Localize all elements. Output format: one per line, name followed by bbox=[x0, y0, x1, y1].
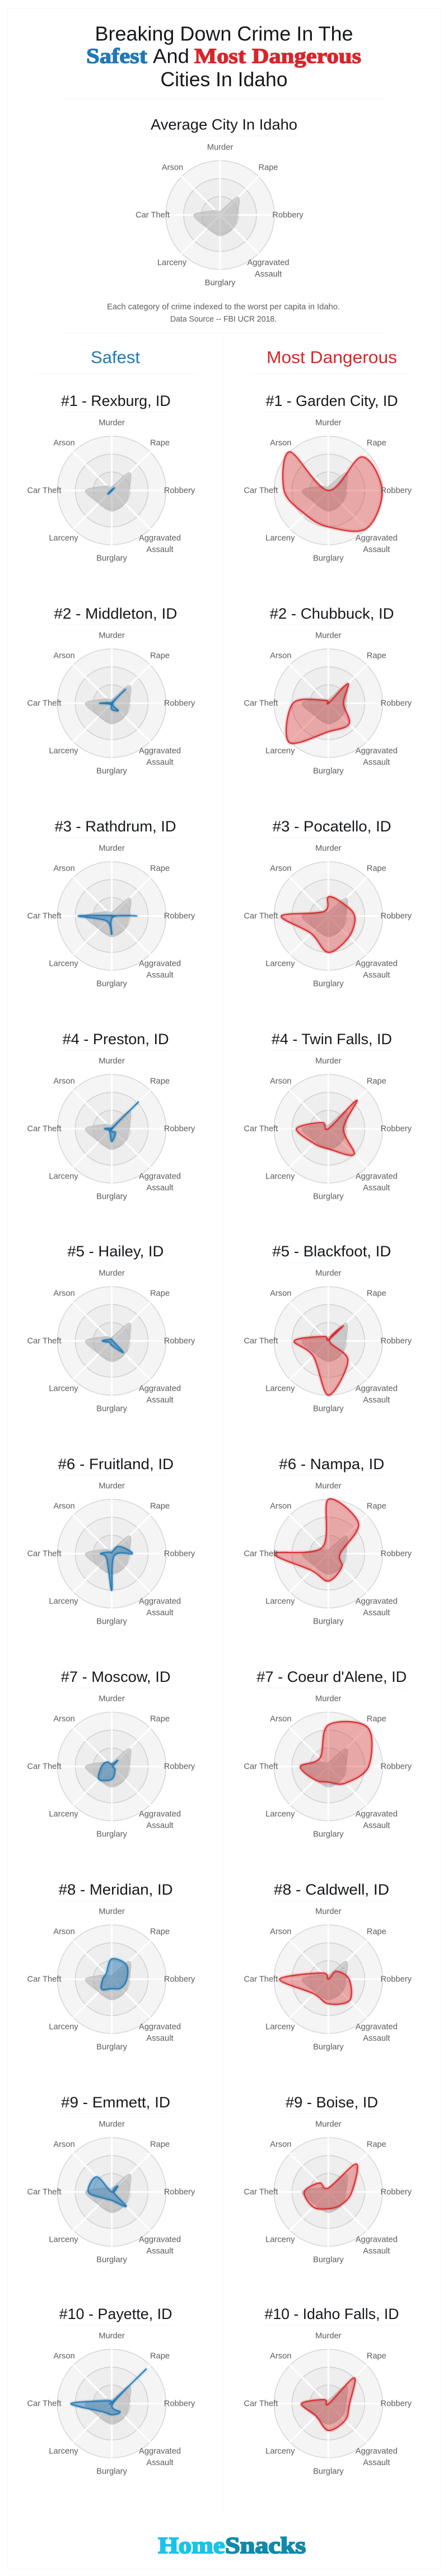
panel: #10 Idaho Falls: Murder bbox=[315, 2331, 342, 2340]
panel: #3 Rathdrum: Car Theft bbox=[27, 911, 61, 920]
panel: #1 Rexburg: Rape bbox=[150, 439, 170, 448]
panel: #2 Chubbuck bbox=[244, 605, 412, 776]
radar chart: average city: Assault bbox=[255, 270, 282, 279]
panel: #2 Middleton: Burglary bbox=[96, 767, 127, 776]
panel: #9 Boise: Aggravated bbox=[356, 2235, 398, 2244]
panel: #2 Middleton bbox=[27, 605, 195, 776]
panel: #5 Blackfoot: Robbery bbox=[381, 1337, 412, 1346]
panel: #4 Twin Falls: Arson bbox=[270, 1077, 291, 1086]
logo: HomeSnacks: Home bbox=[158, 2532, 225, 2558]
panel: #2 Chubbuck: Rape bbox=[367, 652, 386, 661]
panel: #3 Rathdrum: Assault bbox=[146, 971, 174, 980]
panel: #1 Garden City: Burglary bbox=[313, 554, 344, 563]
panel: #9 Emmett: Robbery bbox=[164, 2188, 195, 2197]
panel: #10 Payette: Burglary bbox=[96, 2467, 127, 2476]
panel: #1 Rexburg: Burglary bbox=[96, 554, 127, 563]
panel: #1 Rexburg: #1 - Rexburg, ID bbox=[61, 392, 171, 409]
panel: #6 Fruitland: Aggravated bbox=[139, 1597, 181, 1606]
panel: #8 Caldwell: Rape bbox=[367, 1927, 386, 1936]
panel: #3 Rathdrum: Murder bbox=[99, 844, 125, 853]
panel: #6 Fruitland: #6 - Fruitland, ID bbox=[58, 1456, 174, 1472]
panel: #2 Chubbuck: Aggravated bbox=[356, 747, 398, 756]
panel: #2 Middleton: Rape bbox=[150, 652, 170, 661]
panel: #10 Payette: Murder bbox=[99, 2331, 125, 2340]
panel: #3 Pocatello bbox=[244, 818, 412, 989]
panel: #7 Moscow: Aggravated bbox=[139, 1810, 181, 1818]
panel: #1 Rexburg: Larceny bbox=[49, 534, 78, 543]
title: Cities In Idaho bbox=[160, 68, 288, 91]
radar chart: average city: Robbery bbox=[272, 211, 304, 219]
panel: #1 Garden City: Car Theft bbox=[244, 486, 278, 495]
radar chart: average city: Arson bbox=[162, 163, 183, 172]
panel: #4 Twin Falls: Assault bbox=[363, 1184, 390, 1193]
panel: #9 Boise: Assault bbox=[363, 2247, 390, 2256]
logo: HomeSnacks: Snacks bbox=[225, 2532, 306, 2558]
panel: #4 Preston: Arson bbox=[53, 1077, 75, 1086]
panel: #9 Boise: Arson bbox=[270, 2140, 291, 2149]
panel: #7 Moscow: Murder bbox=[99, 1694, 125, 1703]
panel: #5 Blackfoot: Rape bbox=[367, 1289, 386, 1298]
title: And bbox=[153, 45, 189, 67]
panel: #4 Twin Falls: Aggravated bbox=[356, 1172, 398, 1181]
radar chart: average city: Rape bbox=[258, 163, 278, 172]
panel: #8 Caldwell: Car Theft bbox=[244, 1975, 278, 1984]
panel: #6 Nampa: Murder bbox=[315, 1481, 342, 1490]
panel: #6 Nampa: Robbery bbox=[381, 1550, 412, 1559]
panel: #5 Hailey: Larceny bbox=[49, 1384, 78, 1393]
title: Safest bbox=[86, 45, 147, 68]
panel: #10 Idaho Falls: Car Theft bbox=[244, 2400, 278, 2409]
panel: #8 Caldwell: #8 - Caldwell, ID bbox=[274, 1881, 389, 1898]
panel: #6 Nampa: Larceny bbox=[265, 1597, 295, 1606]
panel: #8 Meridian: Arson bbox=[53, 1927, 75, 1936]
panel: #1 Garden City: Murder bbox=[315, 419, 342, 428]
panel: #7 Coeur d'Alene: #7 - Coeur d'Alene, ID bbox=[256, 1668, 407, 1685]
panel: #5 Hailey: Murder bbox=[99, 1269, 125, 1278]
panel: #8 Meridian: Robbery bbox=[164, 1975, 195, 1984]
panel: #6 Nampa bbox=[244, 1456, 412, 1626]
panel: #9 Boise bbox=[244, 2094, 412, 2264]
panel: #10 Payette: Larceny bbox=[49, 2447, 78, 2456]
panel: #10 Idaho Falls: Arson bbox=[270, 2351, 291, 2360]
panel: #2 Chubbuck: Burglary bbox=[313, 767, 344, 776]
panel: #8 Caldwell: Larceny bbox=[265, 2022, 295, 2031]
caption: methodology and source bbox=[107, 302, 340, 324]
panel: #2 Chubbuck: #2 - Chubbuck, ID bbox=[270, 605, 394, 622]
panel: #9 Emmett: Larceny bbox=[49, 2235, 78, 2244]
panel: #5 Hailey: Arson bbox=[53, 1289, 75, 1298]
panel: #10 Idaho Falls: Rape bbox=[367, 2351, 386, 2360]
panel: #3 Rathdrum: Arson bbox=[53, 864, 75, 873]
panel: #5 Blackfoot: #5 - Blackfoot, ID bbox=[272, 1243, 391, 1260]
panel: #7 Moscow: Assault bbox=[146, 1821, 174, 1830]
panel: #7 Moscow: Burglary bbox=[96, 1830, 127, 1839]
panel: #2 Middleton: Murder bbox=[99, 632, 125, 641]
panel: #2 Middleton: Robbery bbox=[164, 699, 195, 708]
panel: #5 Hailey: Robbery bbox=[164, 1337, 195, 1346]
panel: #4 Twin Falls bbox=[244, 1031, 412, 1201]
panel: #6 Nampa: Assault bbox=[363, 1609, 390, 1617]
panel: #7 Moscow: Car Theft bbox=[27, 1762, 61, 1771]
panel: #10 Idaho Falls: #10 - Idaho Falls, ID bbox=[264, 2306, 399, 2322]
radar chart: average city: Murder bbox=[207, 143, 233, 152]
panel: #8 Meridian: Car Theft bbox=[27, 1975, 61, 1984]
panel: #5 Blackfoot: Arson bbox=[270, 1289, 291, 1298]
panel: #9 Boise: Rape bbox=[367, 2140, 386, 2149]
panel: #4 Preston: Murder bbox=[99, 1057, 125, 1066]
panel: #7 Moscow: Larceny bbox=[49, 1810, 78, 1818]
panel: #6 Nampa: Rape bbox=[367, 1502, 386, 1511]
panel: #2 Middleton: #2 - Middleton, ID bbox=[54, 605, 177, 622]
panel: #1 Garden City: Assault bbox=[363, 545, 390, 554]
panel: #8 Caldwell: Murder bbox=[315, 1907, 342, 1916]
panel: #10 Idaho Falls: Burglary bbox=[313, 2467, 344, 2476]
title: Breaking Down Crime In The bbox=[95, 22, 353, 45]
panel: #3 Rathdrum: Aggravated bbox=[139, 960, 181, 969]
panel: #7 Coeur d'Alene: Aggravated bbox=[356, 1810, 398, 1818]
panel: #2 Chubbuck: Larceny bbox=[265, 747, 295, 756]
panel: #5 Hailey bbox=[27, 1243, 195, 1413]
radar chart: average city bbox=[136, 143, 304, 288]
panel: #9 Emmett bbox=[27, 2094, 195, 2264]
panel: #3 Rathdrum bbox=[27, 818, 195, 989]
title: Most Dangerous bbox=[194, 45, 361, 68]
panel: #10 Payette bbox=[27, 2306, 195, 2476]
panel: #6 Fruitland: Larceny bbox=[49, 1597, 78, 1606]
panel: #3 Pocatello: Arson bbox=[270, 864, 291, 873]
radar chart: average city: Larceny bbox=[157, 259, 187, 268]
panel: #7 Moscow bbox=[27, 1668, 195, 1839]
panel: #5 Blackfoot: Assault bbox=[363, 1396, 390, 1405]
panel: #9 Boise: Larceny bbox=[265, 2235, 295, 2244]
panel: #6 Fruitland: Assault bbox=[146, 1609, 174, 1617]
panel: #4 Preston: Burglary bbox=[96, 1193, 127, 1201]
panel: #3 Pocatello: Larceny bbox=[265, 960, 295, 969]
column heading: safest: Safest bbox=[91, 347, 140, 367]
panel: #4 Twin Falls: Rape bbox=[367, 1077, 386, 1086]
panel: #7 Moscow: Arson bbox=[53, 1714, 75, 1723]
panel: #7 Moscow: Rape bbox=[150, 1714, 170, 1723]
panel: #7 Coeur d'Alene: Larceny bbox=[265, 1810, 295, 1818]
panel: #7 Coeur d'Alene: Rape bbox=[367, 1714, 386, 1723]
panel: #3 Pocatello: Robbery bbox=[381, 911, 412, 920]
panel: #4 Preston: Rape bbox=[150, 1077, 170, 1086]
panel: #2 Middleton: Car Theft bbox=[27, 699, 61, 708]
panel: #1 Rexburg: Aggravated bbox=[139, 534, 181, 543]
radar chart: average city: Burglary bbox=[205, 279, 236, 288]
caption: methodology and source: Data Source -- FBI UCR 2018. bbox=[170, 315, 277, 324]
panel: #3 Rathdrum: #3 - Rathdrum, ID bbox=[55, 818, 176, 835]
panel: #3 Rathdrum: Robbery bbox=[164, 911, 195, 920]
panel: #8 Meridian: Murder bbox=[99, 1907, 125, 1916]
panel: #1 Rexburg bbox=[27, 392, 195, 563]
panel: #10 Idaho Falls: Robbery bbox=[381, 2400, 412, 2409]
panel: #10 Payette: #10 - Payette, ID bbox=[59, 2306, 172, 2322]
panel: #9 Emmett: Arson bbox=[53, 2140, 75, 2149]
panel: #7 Moscow: #7 - Moscow, ID bbox=[61, 1668, 171, 1685]
panel: #5 Hailey: #5 - Hailey, ID bbox=[67, 1243, 164, 1260]
panel: #1 Rexburg: Car Theft bbox=[27, 486, 61, 495]
panel: #7 Coeur d'Alene: Robbery bbox=[381, 1762, 412, 1771]
panel: #9 Boise: Robbery bbox=[381, 2188, 412, 2197]
panel: #10 Idaho Falls: Aggravated bbox=[356, 2447, 398, 2456]
panel: #8 Meridian bbox=[27, 1881, 195, 2051]
radar chart: average city: Aggravated bbox=[247, 259, 290, 268]
panel: #9 Emmett: Murder bbox=[99, 2120, 125, 2129]
panel: #2 Middleton: Aggravated bbox=[139, 747, 181, 756]
panel: #4 Twin Falls: Car Theft bbox=[244, 1124, 278, 1133]
panel: #8 Meridian: Aggravated bbox=[139, 2022, 181, 2031]
panel: #6 Fruitland bbox=[27, 1456, 195, 1626]
panel: #5 Blackfoot: Larceny bbox=[265, 1384, 295, 1393]
panel: #2 Middleton: Larceny bbox=[49, 747, 78, 756]
panel: #6 Nampa: Burglary bbox=[313, 1617, 344, 1626]
panel: #8 Caldwell: Aggravated bbox=[356, 2022, 398, 2031]
panel: #9 Boise: Burglary bbox=[313, 2255, 344, 2264]
panel: #9 Emmett: Car Theft bbox=[27, 2188, 61, 2197]
column heading: most dangerous: Most Dangerous bbox=[267, 347, 397, 367]
panel: #2 Middleton: Assault bbox=[146, 758, 174, 767]
panel: #6 Nampa: Car Theft bbox=[244, 1550, 278, 1559]
panel: #1 Garden City: #1 - Garden City, ID bbox=[266, 392, 398, 409]
panel: #8 Meridian: Assault bbox=[146, 2034, 174, 2043]
panel: #2 Chubbuck: Robbery bbox=[381, 699, 412, 708]
panel: #4 Twin Falls: Larceny bbox=[265, 1172, 295, 1181]
panel: #6 Fruitland: Rape bbox=[150, 1502, 170, 1511]
panel: #4 Preston: Robbery bbox=[164, 1124, 195, 1133]
panel: #5 Hailey: Assault bbox=[146, 1396, 174, 1405]
panel: #8 Caldwell: Assault bbox=[363, 2034, 390, 2043]
panel: #1 Garden City: Robbery bbox=[381, 486, 412, 495]
panel: #10 Payette: Rape bbox=[150, 2351, 170, 2360]
panel: #8 Meridian: #8 - Meridian, ID bbox=[59, 1881, 173, 1898]
panel: #4 Preston: Aggravated bbox=[139, 1172, 181, 1181]
panel: #3 Pocatello: Murder bbox=[315, 844, 342, 853]
panel: #5 Hailey: Burglary bbox=[96, 1404, 127, 1413]
radar chart: average city: Car Theft bbox=[136, 211, 170, 219]
panel: #4 Preston bbox=[27, 1031, 195, 1201]
panel: #9 Boise: Car Theft bbox=[244, 2188, 278, 2197]
caption: methodology and source: Each category of crime indexed to the worst per capita in Idaho. bbox=[107, 302, 340, 311]
panel: #5 Blackfoot: Car Theft bbox=[244, 1337, 278, 1346]
panel: #7 Coeur d'Alene: Car Theft bbox=[244, 1762, 278, 1771]
panel: #10 Idaho Falls: Assault bbox=[363, 2458, 390, 2467]
panel: #3 Pocatello: Aggravated bbox=[356, 960, 398, 969]
panel: #4 Preston: Assault bbox=[146, 1184, 174, 1193]
panel: #4 Twin Falls: #4 - Twin Falls, ID bbox=[272, 1031, 392, 1048]
panel: #8 Caldwell: Robbery bbox=[381, 1975, 412, 1984]
panel: #3 Pocatello: Car Theft bbox=[244, 911, 278, 920]
panel: #3 Rathdrum: Larceny bbox=[49, 960, 78, 969]
panel: #2 Chubbuck: Arson bbox=[270, 652, 291, 661]
panel: #10 Payette: Robbery bbox=[164, 2400, 195, 2409]
panel: #3 Rathdrum: Burglary bbox=[96, 980, 127, 989]
panel: #1 Garden City: Aggravated bbox=[356, 534, 398, 543]
panel: #4 Preston: #4 - Preston, ID bbox=[63, 1031, 169, 1048]
panel: #5 Blackfoot bbox=[244, 1243, 412, 1413]
panel: #7 Coeur d'Alene bbox=[244, 1668, 412, 1839]
panel: #3 Rathdrum: Rape bbox=[150, 864, 170, 873]
panel: #3 Pocatello: #3 - Pocatello, ID bbox=[273, 818, 391, 835]
panel: #10 Payette: Assault bbox=[146, 2458, 174, 2467]
panel: #4 Preston: Car Theft bbox=[27, 1124, 61, 1133]
panel: #6 Fruitland: Murder bbox=[99, 1481, 125, 1490]
panel: #8 Meridian: Burglary bbox=[96, 2042, 127, 2051]
panel: #1 Garden City: Arson bbox=[270, 439, 291, 448]
panel: #9 Emmett: #9 - Emmett, ID bbox=[61, 2094, 170, 2111]
panel: #7 Coeur d'Alene: Assault bbox=[363, 1821, 390, 1830]
panel: #6 Fruitland: Arson bbox=[53, 1502, 75, 1511]
logo: HomeSnacks bbox=[158, 2532, 306, 2558]
panel: #9 Emmett: Burglary bbox=[96, 2255, 127, 2264]
panel: #5 Blackfoot: Murder bbox=[315, 1269, 342, 1278]
panel: #9 Emmett: Aggravated bbox=[139, 2235, 181, 2244]
panel: #2 Middleton: Arson bbox=[53, 652, 75, 661]
panel: #7 Coeur d'Alene: Murder bbox=[315, 1694, 342, 1703]
panel: #9 Boise: #9 - Boise, ID bbox=[286, 2094, 378, 2111]
panel: #10 Payette: Aggravated bbox=[139, 2447, 181, 2456]
panel: #3 Pocatello: Rape bbox=[367, 864, 386, 873]
panel: #3 Pocatello: Burglary bbox=[313, 980, 344, 989]
panel: #6 Nampa: Aggravated bbox=[356, 1597, 398, 1606]
panel: #1 Rexburg: Robbery bbox=[164, 486, 195, 495]
panel: #6 Fruitland: Car Theft bbox=[27, 1550, 61, 1559]
panel: #1 Garden City: Rape bbox=[367, 439, 386, 448]
panel: #1 Garden City: Larceny bbox=[265, 534, 295, 543]
panel: #2 Chubbuck: Murder bbox=[315, 632, 342, 641]
panel: #1 Rexburg: Murder bbox=[99, 419, 125, 428]
panel: #10 Payette: Arson bbox=[53, 2351, 75, 2360]
panel: #6 Nampa: #6 - Nampa, ID bbox=[279, 1456, 384, 1472]
panel: #1 Garden City bbox=[244, 392, 412, 563]
panel: #7 Moscow: Robbery bbox=[164, 1762, 195, 1771]
panel: #4 Twin Falls: Robbery bbox=[381, 1124, 412, 1133]
panel: #5 Hailey: Rape bbox=[150, 1289, 170, 1298]
title bbox=[86, 22, 361, 91]
panel: #9 Boise: Murder bbox=[315, 2120, 342, 2129]
panel: #4 Preston: Larceny bbox=[49, 1172, 78, 1181]
panel: #8 Caldwell bbox=[244, 1881, 412, 2051]
panel: #10 Idaho Falls bbox=[244, 2306, 412, 2476]
heading: average city: Average City In Idaho bbox=[151, 116, 297, 133]
panel: #4 Twin Falls: Burglary bbox=[313, 1193, 344, 1201]
panel: #6 Fruitland: Burglary bbox=[96, 1617, 127, 1626]
panel: #6 Fruitland: Robbery bbox=[164, 1550, 195, 1559]
panel: #9 Emmett: Rape bbox=[150, 2140, 170, 2149]
panel: #7 Coeur d'Alene: Burglary bbox=[313, 1830, 344, 1839]
panel: #8 Meridian: Larceny bbox=[49, 2022, 78, 2031]
panel: #10 Payette: Car Theft bbox=[27, 2400, 61, 2409]
panel: #2 Chubbuck: Car Theft bbox=[244, 699, 278, 708]
panel: #3 Pocatello: Assault bbox=[363, 971, 390, 980]
panel: #8 Caldwell: Arson bbox=[270, 1927, 291, 1936]
panel: #10 Idaho Falls: Larceny bbox=[265, 2447, 295, 2456]
panel: #1 Rexburg: Assault bbox=[146, 545, 174, 554]
panel: #4 Twin Falls: Murder bbox=[315, 1057, 342, 1066]
panel: #5 Hailey: Car Theft bbox=[27, 1337, 61, 1346]
panel: #6 Nampa: Arson bbox=[270, 1502, 291, 1511]
panel: #5 Hailey: Aggravated bbox=[139, 1384, 181, 1393]
panel: #8 Meridian: Rape bbox=[150, 1927, 170, 1936]
panel: #8 Caldwell: Burglary bbox=[313, 2042, 344, 2051]
panel: #5 Blackfoot: Burglary bbox=[313, 1404, 344, 1413]
panel: #7 Coeur d'Alene: Arson bbox=[270, 1714, 291, 1723]
panel: #1 Rexburg: Arson bbox=[53, 439, 75, 448]
panel: #9 Emmett: Assault bbox=[146, 2247, 174, 2256]
panel: #2 Chubbuck: Assault bbox=[363, 758, 390, 767]
panel: #5 Blackfoot: Aggravated bbox=[356, 1384, 398, 1393]
